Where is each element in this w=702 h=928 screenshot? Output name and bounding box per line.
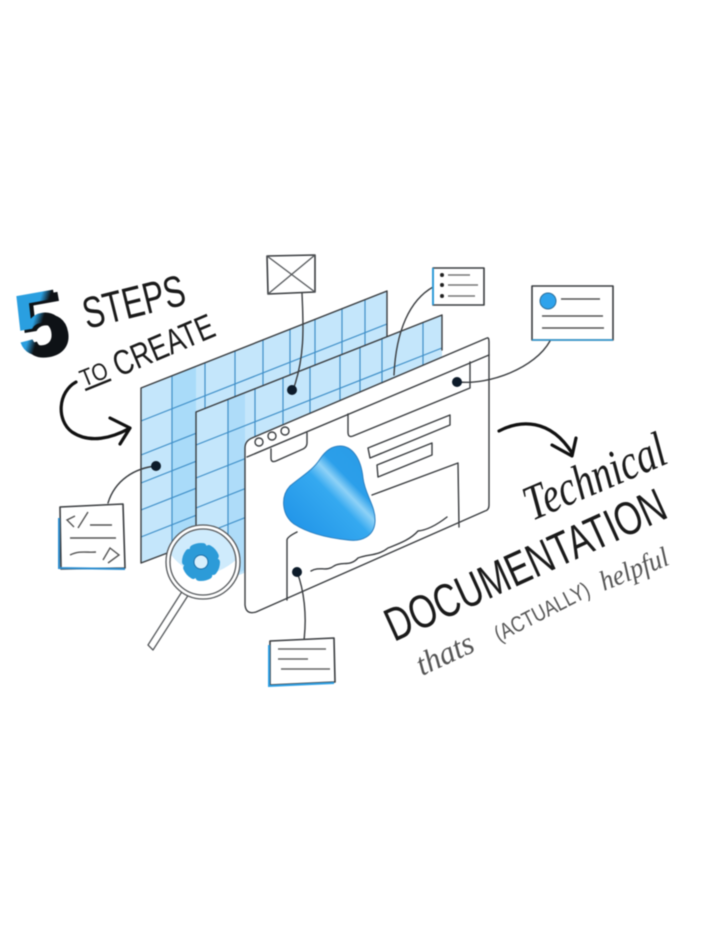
heading number 5: 5	[11, 273, 78, 380]
connector: profile card	[458, 341, 550, 382]
card: code	[59, 504, 125, 569]
heading: steps: STEPS	[78, 266, 190, 339]
subtitle: actually: (ACTUALLY)	[490, 577, 594, 646]
content box	[287, 463, 459, 600]
magnifier handle	[148, 590, 189, 650]
subtitle: helpful: helpful	[595, 542, 674, 597]
cloud shape	[284, 446, 375, 540]
panel: back grid sheet	[141, 291, 387, 563]
magnifier lens	[166, 525, 240, 599]
heading: to: TO	[76, 357, 112, 393]
text field one	[368, 415, 450, 458]
heading: create: CREATE	[107, 307, 221, 384]
icon: magnifier with gear	[148, 525, 240, 650]
arrow: curved to title	[499, 424, 576, 456]
text field two	[377, 443, 432, 477]
icon: gear	[186, 546, 216, 578]
panel: browser window	[245, 338, 489, 613]
card: bottom notes	[269, 638, 335, 686]
wave line	[311, 517, 447, 571]
browser window buttons	[255, 427, 289, 446]
card: profile	[532, 286, 613, 340]
icon: envelope card	[267, 255, 315, 294]
heading number 5: 5	[7, 271, 73, 378]
browser title bar	[247, 355, 489, 462]
connector: envelope to grid	[293, 293, 303, 390]
arrow: curved to grid	[61, 382, 130, 444]
connector: bottom card	[297, 572, 305, 640]
connector: code card	[108, 466, 156, 503]
connector: list card	[394, 287, 433, 375]
subtitle: thats: thats	[410, 624, 479, 682]
card: list	[433, 268, 484, 305]
panel: middle grid sheet	[196, 315, 442, 592]
anchor dots	[151, 377, 462, 577]
